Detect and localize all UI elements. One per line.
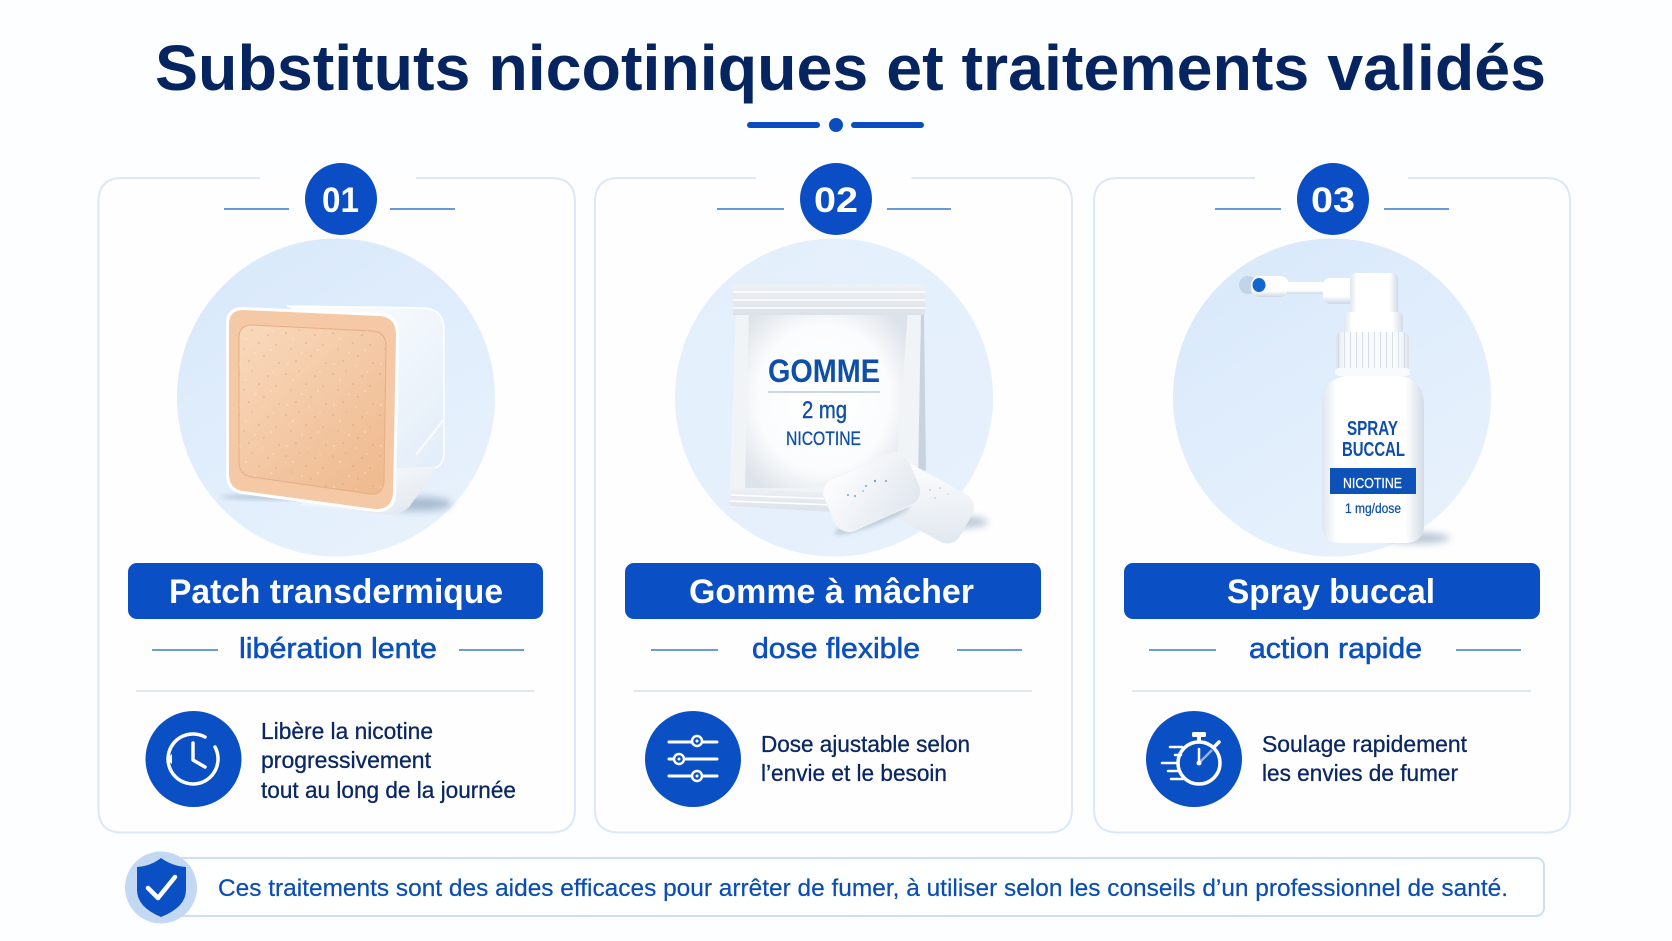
description: patch: Libère la nicotine: [261, 718, 433, 744]
description: gomme: [761, 731, 970, 786]
label: Patch transdermique: [128, 563, 543, 619]
card outline 3: [1094, 178, 1570, 832]
callout text: Ces traitements sont des aides efficaces pour arrêter de fumer, à utiliser selon les conseils d’un professionnel de santé.: [218, 875, 1508, 902]
pack label: [768, 353, 880, 450]
number badge 03: 03: [1311, 181, 1355, 220]
icon: clock: [146, 711, 242, 807]
description: gomme: Dose ajustable selon: [761, 731, 970, 757]
subtitle: dose flexible: dose flexible: [752, 633, 920, 665]
panel: spray buccal: [1094, 163, 1570, 832]
bottle label: SPRAY: [1347, 418, 1398, 440]
description: spray: Soulage rapidement: [1262, 731, 1468, 757]
description: patch: [261, 718, 516, 803]
number badge 03: [1215, 163, 1449, 235]
subtitle: libération lente: libération lente: [239, 633, 437, 665]
illustration: spray bottle: [1173, 238, 1491, 556]
number badge 02: [717, 163, 951, 235]
panel: patch transdermique: [98, 163, 575, 832]
icon: stopwatch: [1146, 711, 1242, 807]
card outline 1: [98, 178, 575, 832]
callout: conseil professionnel: [125, 852, 1544, 924]
bottle label: [1330, 418, 1416, 516]
label: Gomme à mâcher: Gomme à mâcher: [689, 573, 974, 611]
label: Spray buccal: Spray buccal: [1227, 573, 1435, 611]
subtitle: action rapide: action rapide: [1249, 633, 1422, 665]
number badge 01: [224, 163, 455, 235]
label: Gomme à mâcher: [625, 563, 1041, 619]
label: Spray buccal: [1124, 563, 1540, 619]
pack label: NICOTINE: [786, 429, 861, 450]
description: gomme: l’envie et le besoin: [761, 760, 947, 786]
bottle label: NICOTINE: [1343, 475, 1402, 492]
bottle label: 1 mg/dose: [1345, 500, 1401, 516]
illustration: gum pack: [675, 238, 993, 556]
description: patch: tout au long de la journée: [261, 777, 516, 803]
panel: gomme à mâcher: [595, 163, 1072, 832]
title: Substituts nicotiniques et traitements validés: [155, 32, 1546, 104]
gum pieces: [819, 448, 979, 549]
description: patch: progressivement: [261, 747, 432, 773]
pack label: 2 mg: [802, 397, 847, 424]
pack label: GOMME: [768, 353, 880, 389]
icon: sliders: [645, 711, 741, 807]
description: spray: [1262, 731, 1468, 786]
bottle label: BUCCAL: [1342, 439, 1405, 461]
label: Patch transdermique: Patch transdermique: [169, 573, 503, 611]
number badge 02: 02: [814, 181, 858, 220]
card outline 2: [595, 178, 1072, 832]
icon: shield: [125, 852, 197, 924]
title divider: [747, 118, 924, 132]
number badge 01: 01: [322, 181, 359, 220]
illustration: patch: [177, 238, 495, 556]
description: spray: les envies de fumer: [1262, 760, 1458, 786]
